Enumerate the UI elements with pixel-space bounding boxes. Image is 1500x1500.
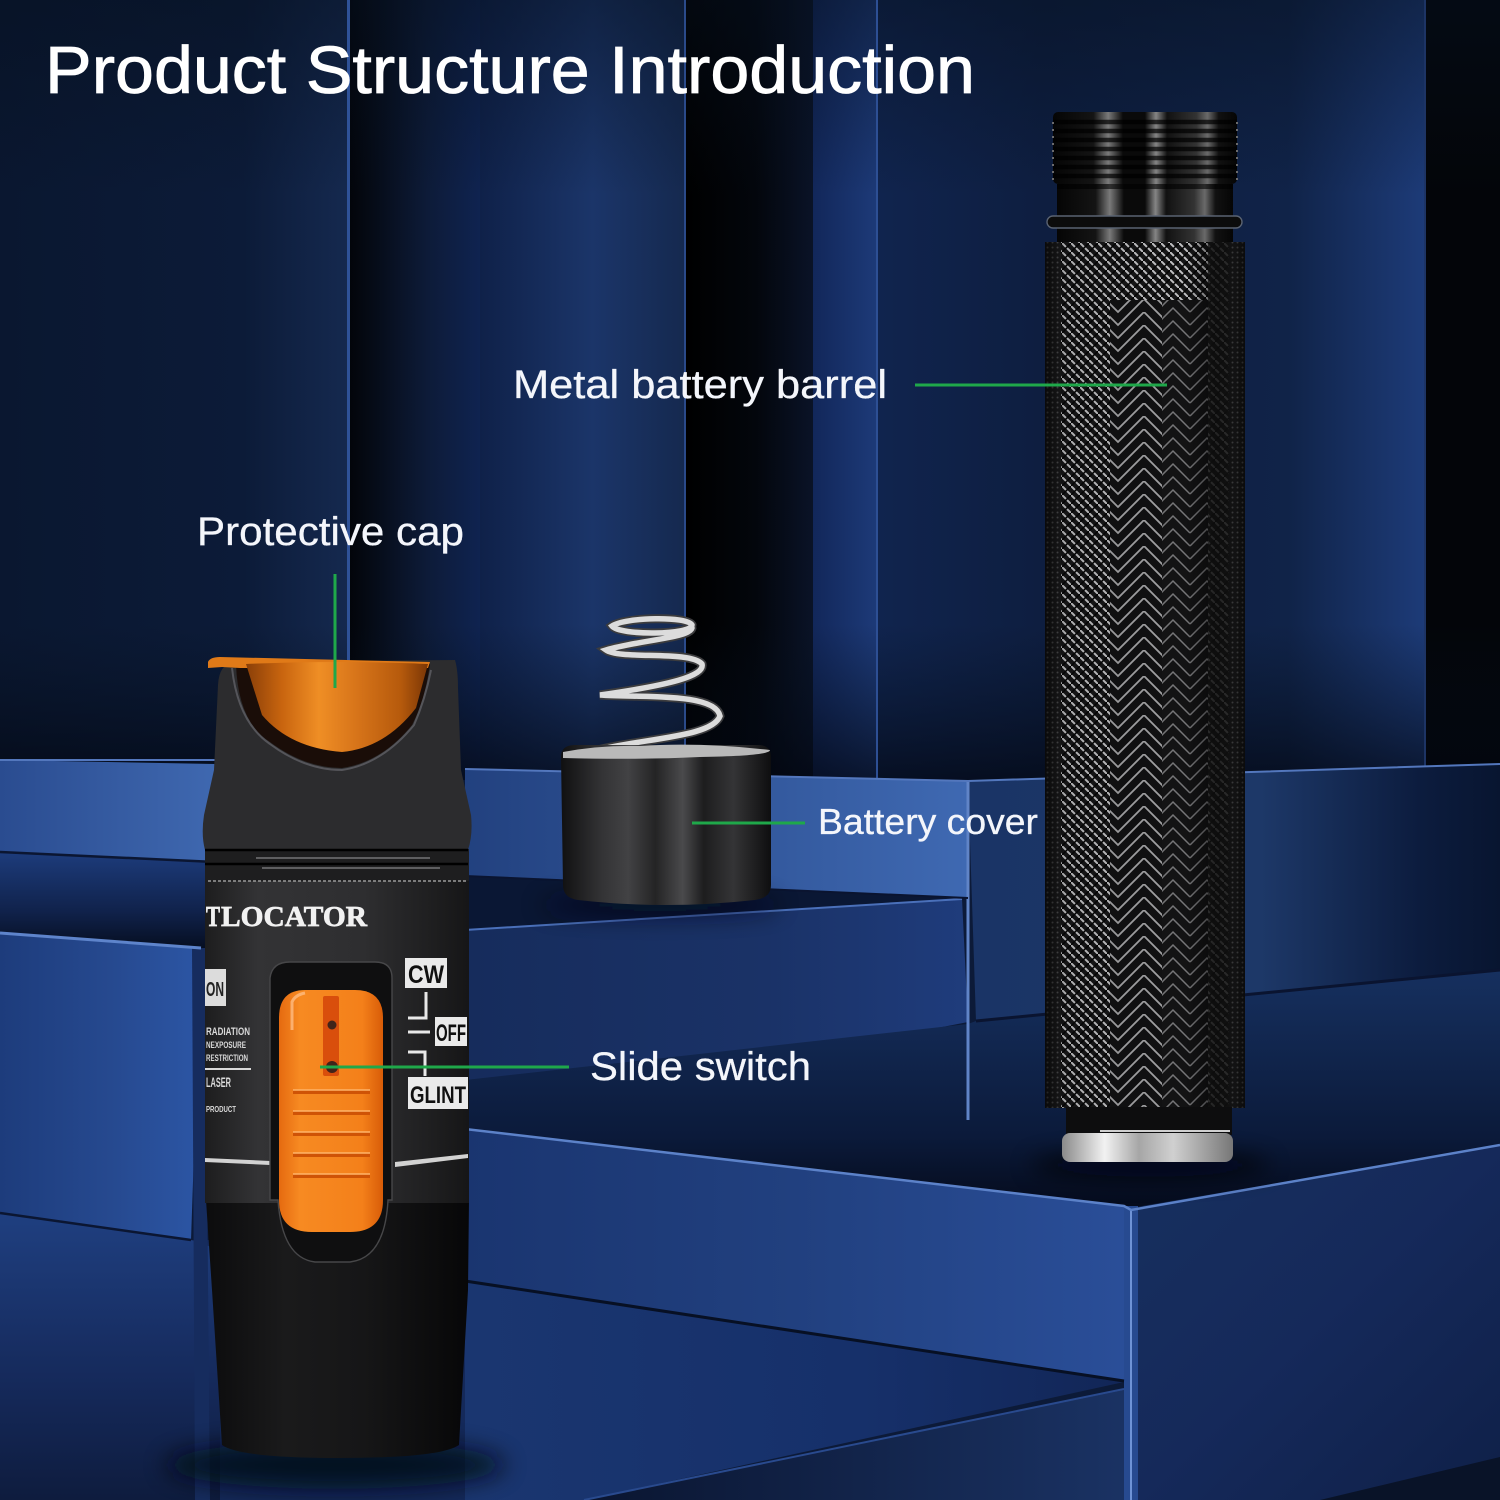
background: vertical wall panels xyxy=(0,0,1500,780)
background: stepped blue platforms xyxy=(0,760,1500,1500)
mode labels CW OFF GLINT: OFF xyxy=(436,1020,466,1047)
device label body xyxy=(205,880,469,1203)
white stripe rings xyxy=(205,1154,468,1167)
slide switch knob xyxy=(279,990,383,1232)
left small warnings: LASER xyxy=(206,1074,231,1090)
left small warnings: RADIATION xyxy=(206,1026,250,1038)
label: metal battery barrel: Metal battery barrel xyxy=(513,363,887,407)
label: battery cover xyxy=(692,801,1038,842)
label: metal battery barrel xyxy=(513,363,1167,407)
left small warnings: ON xyxy=(206,979,224,1001)
left small warnings: NEXPOSURE xyxy=(206,1040,246,1050)
slide switch recess xyxy=(270,962,392,1262)
label: slide switch: Slide switch xyxy=(590,1045,811,1089)
device collar rings xyxy=(205,849,469,881)
battery cover cap xyxy=(561,745,771,905)
metal battery barrel xyxy=(1045,112,1245,1162)
barrel bottom silver ring xyxy=(1062,1107,1233,1162)
barrel threaded neck xyxy=(1047,112,1242,242)
mode labels CW OFF GLINT xyxy=(405,958,468,1109)
mode labels CW OFF GLINT: GLINT xyxy=(410,1082,466,1109)
left small warnings xyxy=(205,969,251,1114)
label: protective cap: Protective cap xyxy=(197,510,464,554)
barrel knurled body xyxy=(1045,242,1245,1108)
protective cap (orange) xyxy=(208,657,431,770)
left small warnings: RESTRICTION xyxy=(206,1053,248,1063)
mode labels CW OFF GLINT: CW xyxy=(408,961,444,989)
brand text: LOCATOR xyxy=(221,902,368,933)
label: slide switch xyxy=(320,1045,811,1089)
brand text: T xyxy=(206,902,220,933)
spring xyxy=(590,619,720,752)
title: Product Structure Introduction xyxy=(45,33,975,108)
fault locator device xyxy=(203,657,472,1458)
label: battery cover: Battery cover xyxy=(818,801,1038,842)
spring and battery cover xyxy=(561,619,771,905)
left small warnings: PRODUCT xyxy=(206,1105,236,1114)
device upper shoulder xyxy=(203,660,472,850)
label: protective cap xyxy=(197,510,464,688)
device lower barrel xyxy=(206,1200,469,1458)
